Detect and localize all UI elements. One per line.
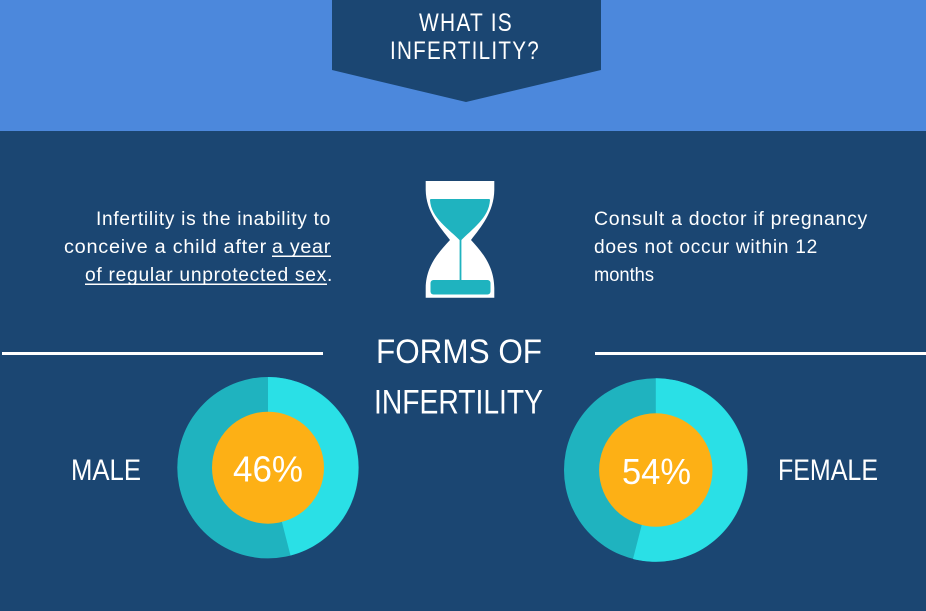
- female label: FEMALE: [778, 454, 878, 487]
- female donut chart 54%: 54%: [622, 451, 691, 492]
- title banner: [332, 0, 601, 102]
- definition text block: a year: [272, 237, 331, 258]
- title banner: INFERTILITY?: [390, 37, 540, 65]
- right divider: [595, 352, 926, 355]
- icon: hourglass: [426, 181, 494, 298]
- definition text block: .: [327, 265, 332, 286]
- title banner: WHAT IS: [419, 9, 513, 37]
- male label: MALE: [71, 454, 141, 487]
- definition text block: conceive a child after: [64, 237, 267, 258]
- top light blue band: [0, 0, 926, 131]
- forms of infertility heading: [374, 333, 543, 422]
- definition text block: Infertility is the inability to: [96, 209, 331, 230]
- doctor advice text block: does not occur within 12: [594, 237, 818, 258]
- forms of infertility heading: FORMS OF: [376, 333, 542, 371]
- definition text block: [64, 209, 332, 286]
- male donut chart 46%: [177, 377, 359, 558]
- definition text block: of regular unprotected sex: [85, 265, 327, 286]
- male donut chart 46%: 46%: [233, 448, 303, 490]
- female donut chart 54%: [564, 378, 748, 562]
- doctor advice text block: Consult a doctor if pregnancy: [594, 209, 868, 230]
- doctor advice text block: months: [594, 265, 654, 286]
- forms of infertility heading: INFERTILITY: [374, 384, 543, 422]
- doctor advice text block: [594, 209, 868, 286]
- left divider: [2, 352, 323, 355]
